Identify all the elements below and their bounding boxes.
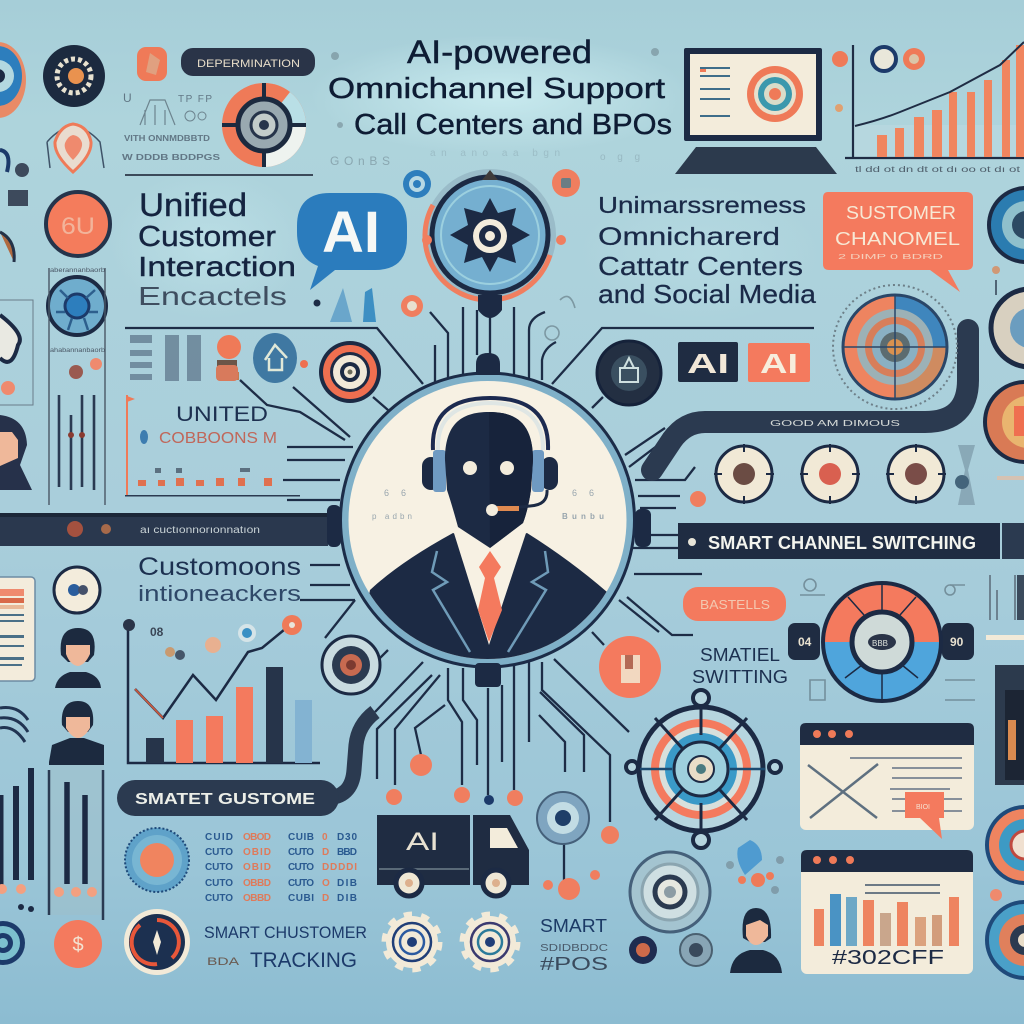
blue network circle xyxy=(48,277,106,335)
mid-left heading xyxy=(138,553,301,606)
code list: OBID xyxy=(243,862,271,873)
dark pill label: DEPERMINATION xyxy=(197,58,300,70)
AI dark tag xyxy=(678,342,738,382)
blurred small icons title left: an ano aa bgn xyxy=(430,148,560,159)
orange pill xyxy=(683,587,786,621)
customer channel callout: SUSTOMER xyxy=(846,203,956,223)
right heading xyxy=(598,192,817,309)
code list: OBBD xyxy=(243,878,271,889)
window card one xyxy=(800,723,974,839)
small blue ring icon xyxy=(403,170,431,198)
concentric gear target lower xyxy=(322,636,380,694)
top-right chart: tl dd ot dn dt ot dı oo ot dı ot xyxy=(855,165,1021,174)
central agent portrait xyxy=(327,353,651,690)
lapel lines xyxy=(432,551,548,652)
truck: AI xyxy=(406,828,439,856)
mid-left heading: Customoons xyxy=(138,553,301,581)
code list: CUID xyxy=(205,832,233,843)
mid-left heading: intioneackers xyxy=(138,581,301,606)
person avatar upper xyxy=(55,628,101,688)
title: Call Centers and BPOs xyxy=(354,109,672,141)
AI dark tag: AI xyxy=(687,348,729,379)
lower left pill xyxy=(117,780,339,816)
code list: 0 xyxy=(322,832,328,843)
big radial target xyxy=(833,285,957,409)
table glyph block xyxy=(130,335,201,381)
lens large xyxy=(630,852,710,932)
right heading: Omnicharerd xyxy=(598,223,780,251)
small sketch text cluster: W DDDB BDDPGS xyxy=(122,153,221,162)
person avatar lower with column xyxy=(49,701,104,920)
AI speech bubble: AI xyxy=(322,200,380,265)
code list: OBOD xyxy=(243,832,271,843)
orange 6U circle: 6U xyxy=(61,213,95,240)
pale portrait notes: 66 xyxy=(572,488,594,498)
home icon circle xyxy=(253,333,297,383)
divider rule xyxy=(125,174,313,176)
window card two: #302CFF xyxy=(832,947,944,969)
small sketch text cluster: VITH ONNMDBBTD xyxy=(124,134,210,143)
AI orange tag: AI xyxy=(760,348,798,379)
three round targets xyxy=(714,444,946,504)
orange coin: $ xyxy=(72,934,84,956)
donut gauge: BBB xyxy=(872,639,888,648)
smart customer tracking text: SMART CHUSTOMER xyxy=(204,923,367,942)
right dark banner xyxy=(678,523,1024,559)
right heading: and Social Media xyxy=(598,279,817,309)
small orange icon right xyxy=(552,169,580,197)
dark wire node xyxy=(484,795,494,805)
gears xyxy=(385,915,517,969)
pale sketch icons xyxy=(545,296,575,340)
code list: CUTO xyxy=(288,862,314,873)
smart switching text: SWITTING xyxy=(692,667,788,687)
gear target top centre xyxy=(422,169,566,318)
camera lens upper xyxy=(537,792,589,844)
wheel target xyxy=(626,690,781,848)
shield pin icon xyxy=(47,124,104,172)
small sketch text cluster: TP FP xyxy=(178,94,212,105)
colourful cluster icon xyxy=(726,840,784,894)
compass circle xyxy=(124,909,190,975)
dark pill label xyxy=(181,48,315,76)
window card two xyxy=(801,850,973,974)
smart pos text: SMART xyxy=(540,916,607,936)
code list: DIB xyxy=(337,878,357,889)
smart switching text xyxy=(692,645,788,687)
suit jacket xyxy=(369,533,606,659)
customer channel callout: CHANOMEL xyxy=(835,229,960,249)
monitor xyxy=(675,48,837,174)
shirt xyxy=(453,530,527,645)
lower-left bar chart xyxy=(123,615,320,763)
headset band xyxy=(433,398,548,450)
AI speech bubble xyxy=(297,193,407,290)
right heading: Cattatr Centers xyxy=(598,251,803,281)
code list: DIB xyxy=(337,893,357,904)
code list: CUTO xyxy=(205,862,233,873)
orange 6U circle xyxy=(46,192,110,256)
orange coin xyxy=(54,920,102,968)
code list: D xyxy=(322,893,329,904)
circuit wires xyxy=(125,307,814,885)
pale portrait notes: p adbn xyxy=(372,512,412,521)
small right pale icons xyxy=(955,266,1024,505)
smart customer tracking text: BDA xyxy=(207,956,240,968)
code list: DDDDI xyxy=(322,862,357,873)
code list: D30 xyxy=(337,832,357,843)
microphone xyxy=(500,490,547,509)
lower-left bar chart: 08 xyxy=(150,625,164,639)
right heading: Unimarssremess xyxy=(598,192,806,218)
small orange icon left xyxy=(401,295,423,317)
small figures under bubble xyxy=(314,288,376,322)
sliders panel: aberannanbaorb xyxy=(50,268,106,274)
code list: CUTO xyxy=(288,878,314,889)
code list: CUBI xyxy=(288,893,314,904)
left card xyxy=(0,577,35,681)
left heading: Encactels xyxy=(138,281,287,311)
right dark banner: SMART CHANNEL SWITCHING xyxy=(708,533,976,553)
smart pos text: SDIDBDDC xyxy=(540,943,608,954)
top-right chart xyxy=(832,42,1024,174)
right thin chart fragment xyxy=(986,575,1024,640)
window card one: BIOI xyxy=(916,804,930,811)
cream circle icon xyxy=(54,567,100,613)
tall dark photo strip xyxy=(995,665,1024,785)
AI orange tag xyxy=(748,343,810,382)
code list: BBD xyxy=(337,847,357,858)
smart pos text: #POS xyxy=(540,954,608,974)
left dark connector band xyxy=(0,513,328,546)
pale portrait notes xyxy=(372,488,604,521)
smart pos text xyxy=(540,916,608,974)
code list: CUTO xyxy=(288,847,314,858)
left heading: Customer xyxy=(138,221,276,253)
left edge bars xyxy=(0,768,34,912)
curved band label: GOOD AM DIMOUS xyxy=(770,419,900,428)
code list: CUTO xyxy=(205,847,233,858)
donut side tabs: 90 xyxy=(950,635,964,649)
side caps xyxy=(327,505,341,547)
customer channel callout: 2 DIMP 0 BDRD xyxy=(838,254,943,261)
concentric target xyxy=(319,341,381,403)
code list: CUTO xyxy=(205,878,233,889)
small circle icons xyxy=(629,934,712,966)
blurred small icons title left: ogg xyxy=(600,152,640,163)
orange dot xyxy=(300,360,308,368)
code list: OBID xyxy=(243,847,271,858)
small sketch text cluster: U xyxy=(123,91,132,105)
code list: CUTO xyxy=(205,893,233,904)
band small labels: aı cuctıonnorıonnatıon xyxy=(140,525,260,536)
left edge target xyxy=(0,921,25,965)
unified panel: UNITED xyxy=(176,403,268,426)
ear cups xyxy=(422,450,558,492)
code list: OBBD xyxy=(243,893,271,904)
left heading xyxy=(138,187,296,311)
code list: CUIB xyxy=(288,832,314,843)
node dots on wires xyxy=(386,491,706,900)
segmented ring target xyxy=(222,83,306,167)
right edge lower targets xyxy=(987,807,1024,978)
code list: O xyxy=(322,878,330,889)
blurred small icons title left: GOnBS xyxy=(330,154,390,168)
blurred small icons title left xyxy=(330,48,659,168)
unified panel: COBBOONS M xyxy=(159,430,277,447)
donut side tabs: 04 xyxy=(798,635,812,649)
pale portrait notes: Bunbu xyxy=(562,512,604,521)
stacked orange icons xyxy=(216,335,241,381)
orange badge xyxy=(137,47,167,81)
dotted orange target xyxy=(125,828,189,892)
tiny donut side icons xyxy=(800,579,975,700)
dark lock circle xyxy=(597,341,661,405)
truck xyxy=(377,815,529,896)
left heading: Interaction xyxy=(138,251,296,282)
orange pill: BASTELLS xyxy=(700,597,770,612)
sliders panel: ahabannanbaorb xyxy=(50,348,106,354)
code list xyxy=(205,832,357,904)
eyes xyxy=(463,461,477,475)
donut side tabs xyxy=(788,623,974,660)
unified panel xyxy=(125,395,300,496)
left edge small icons xyxy=(0,150,33,405)
right curved dark band xyxy=(652,330,968,470)
wifi arcs xyxy=(0,708,28,742)
smart customer tracking text: TRACKING xyxy=(250,949,357,972)
left heading: Unified xyxy=(139,187,247,223)
smart customer tracking text xyxy=(204,923,367,972)
band small labels xyxy=(0,513,328,537)
sliders panel xyxy=(49,268,106,505)
lower left dark connector xyxy=(310,712,375,798)
title: AI-powered xyxy=(407,34,592,70)
customer channel callout xyxy=(823,192,973,292)
woman avatar left edge xyxy=(0,415,32,490)
head xyxy=(445,412,533,548)
top-left partial target xyxy=(0,42,26,118)
title xyxy=(328,34,672,141)
tie xyxy=(478,551,502,642)
small sketch text cluster xyxy=(122,91,221,162)
right edge circles xyxy=(985,188,1024,462)
title: Omnichannel Support xyxy=(328,73,665,105)
donut gauge xyxy=(823,583,941,701)
dark seal icon xyxy=(43,45,105,107)
orange circle icon xyxy=(599,636,661,698)
pale portrait notes: 6 6 xyxy=(384,488,406,498)
small person xyxy=(730,908,782,973)
lower left pill: SMATET GUSTOME xyxy=(135,791,315,808)
small orange dot right xyxy=(990,889,1002,901)
smart switching text: SMATIEL xyxy=(700,645,780,665)
code list: D xyxy=(322,847,329,858)
